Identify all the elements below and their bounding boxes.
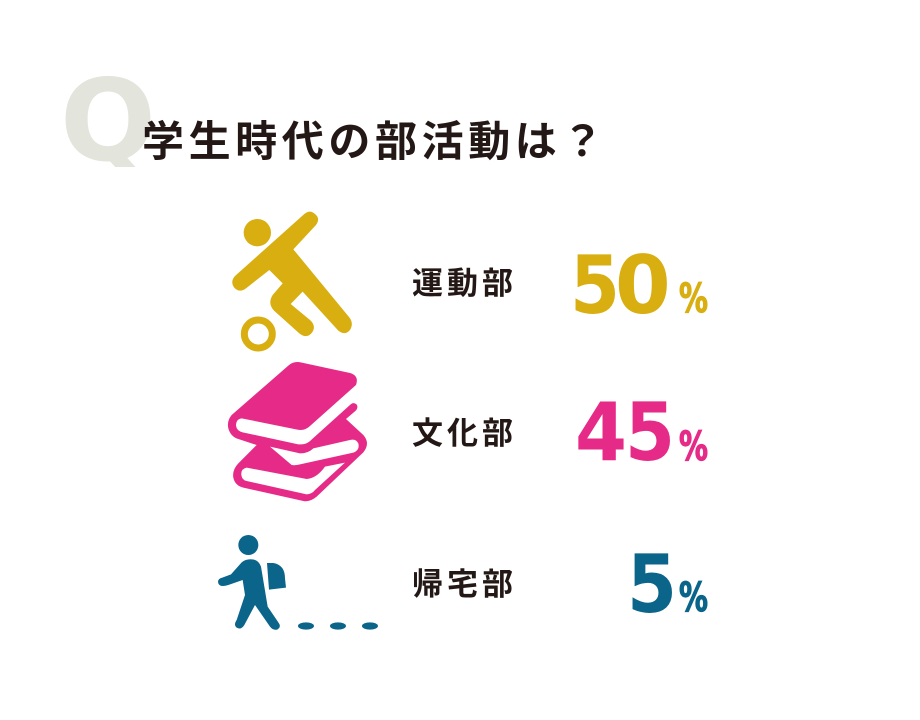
row: culture club — [228, 362, 708, 501]
label: culture: 文化部 — [412, 416, 517, 451]
decorative Q: Q — [60, 55, 156, 187]
icon: stacked books — [228, 362, 367, 501]
icon: soccer player — [232, 212, 352, 348]
row: go-home club — [218, 535, 708, 631]
value: 45%: 5 — [625, 386, 675, 479]
label: sports: 運動部 — [412, 266, 517, 301]
title: 学生時代の部活動は？ — [142, 118, 608, 165]
value: 50%: 5 — [570, 239, 620, 332]
value: 5%: % — [679, 575, 708, 621]
label: go-home: 帰宅部 — [412, 567, 517, 602]
icon: walking student — [218, 535, 378, 630]
value: 5% — [627, 538, 708, 631]
value: 45% — [575, 386, 708, 479]
row: sports club — [232, 212, 708, 348]
value: 5%: 5 — [627, 538, 677, 631]
value: 45%: 4 — [575, 386, 627, 479]
value: 45%: % — [679, 424, 708, 470]
value: 50%: % — [679, 276, 708, 322]
value: 50%: 0 — [615, 239, 671, 332]
value: 50% — [570, 239, 708, 332]
